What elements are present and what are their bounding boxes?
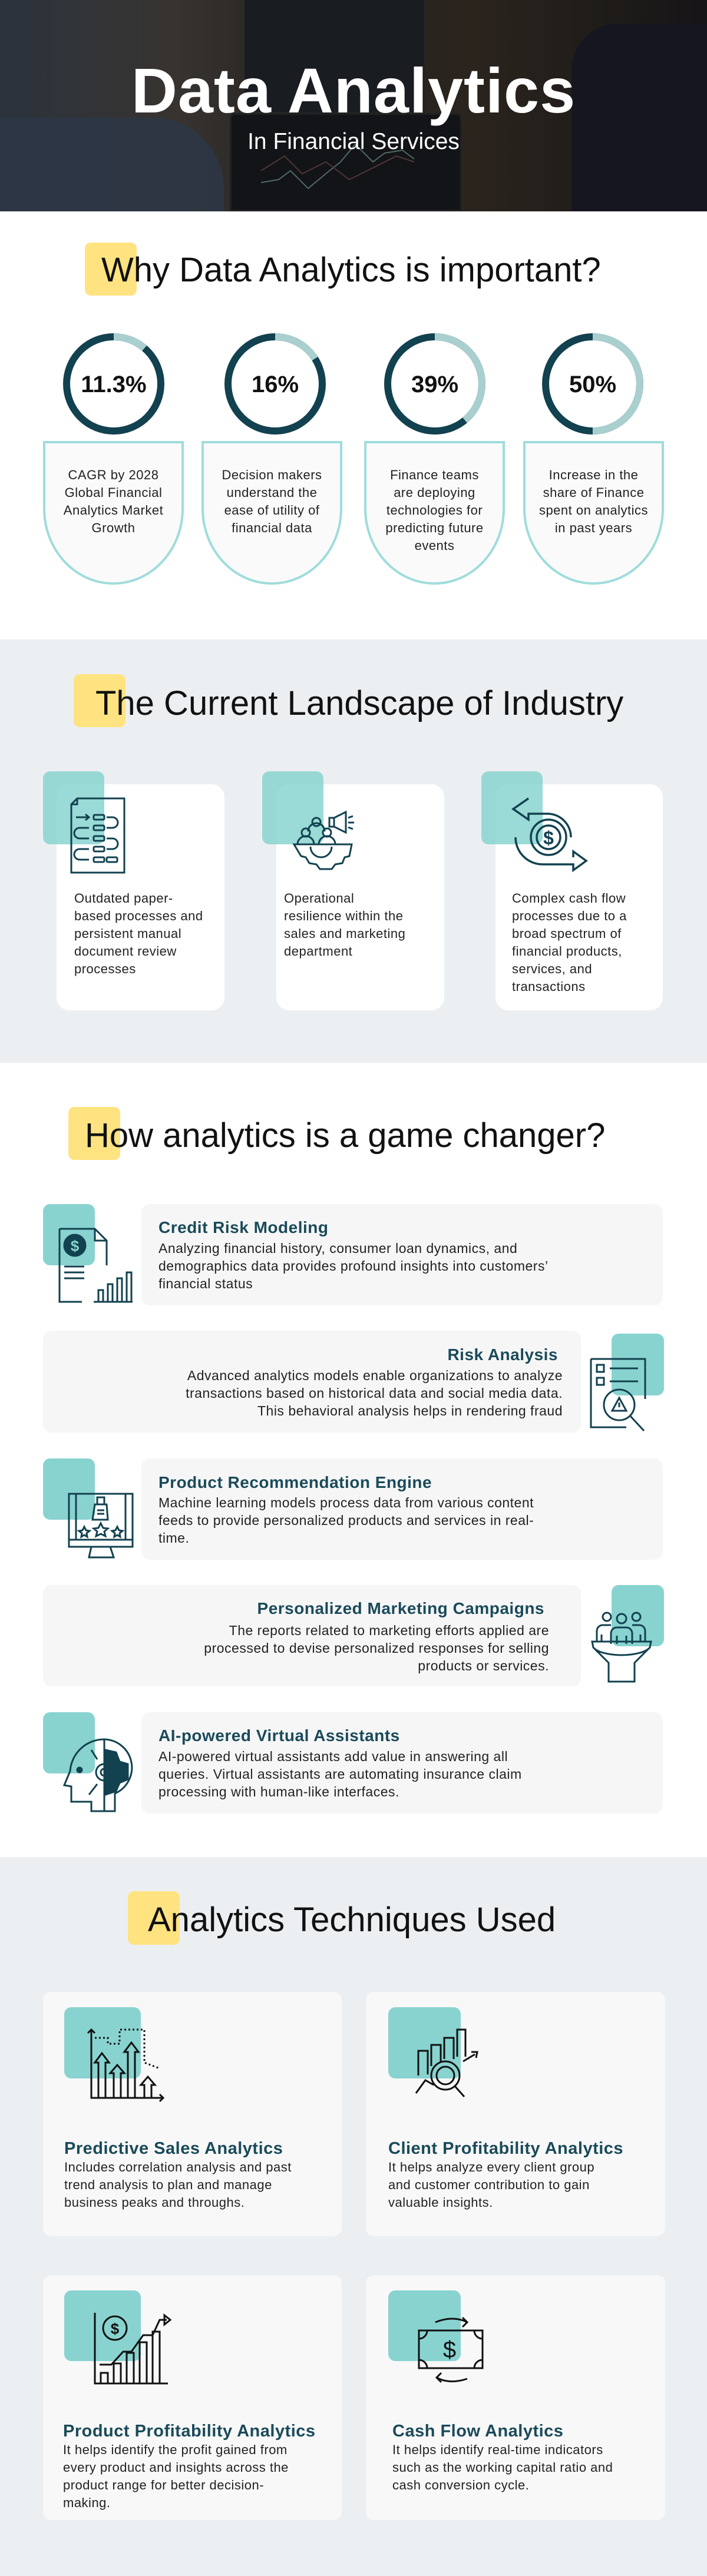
card: product profitability: product range for better decision- bbox=[63, 2478, 264, 2492]
row: product recommendation: time. bbox=[158, 1530, 189, 1546]
card: cash flow: cash conversion cycle. bbox=[392, 2478, 529, 2492]
icon: banknote with arrows: $ bbox=[443, 2337, 456, 2363]
row: AI virtual assistants: processing with human-like interfaces. bbox=[158, 1784, 399, 1799]
row: AI virtual assistants bbox=[43, 1712, 663, 1814]
ring 11.3%: 11.3% bbox=[81, 372, 147, 397]
card: product profitability: making. bbox=[63, 2495, 111, 2510]
stat 2: Decision makers bbox=[222, 468, 322, 482]
stat 2 bbox=[201, 333, 342, 585]
stat 4: share of Finance bbox=[543, 485, 644, 500]
row: personalized marketing bbox=[43, 1585, 664, 1686]
stat 4: in past years bbox=[555, 520, 632, 535]
card: operational resilience: resilience within the bbox=[284, 909, 403, 923]
stat 3: technologies for bbox=[386, 503, 483, 518]
row: credit risk bbox=[43, 1204, 663, 1305]
stat 4: 50% bbox=[569, 372, 616, 397]
heading: why important: Why Data Analytics is important? bbox=[101, 251, 601, 289]
card: predictive sales bbox=[43, 1992, 342, 2236]
stat 2: understand the bbox=[227, 485, 317, 500]
heading bbox=[74, 674, 623, 727]
stat 3: 39% bbox=[411, 372, 458, 397]
stat 3: Finance teams bbox=[390, 468, 479, 482]
row: risk analysis: transactions based on historical data and social media data. bbox=[186, 1385, 563, 1401]
row: risk analysis: This behavioral analysis helps in rendering fraud bbox=[257, 1403, 563, 1418]
card: complex cash flow bbox=[481, 771, 663, 1010]
stat 1: Global Financial bbox=[65, 485, 162, 500]
card: complex cash flow: processes due to a bbox=[512, 909, 627, 923]
card: paper processes bbox=[43, 771, 224, 1010]
icon: people funnel bbox=[591, 1612, 652, 1683]
card: complex cash flow: Complex cash flow bbox=[512, 891, 626, 906]
card: client profitability bbox=[366, 1992, 665, 2236]
card: product profitability: Product Profitability Analytics bbox=[63, 2422, 316, 2441]
icon: bars with magnifier bbox=[415, 2029, 478, 2097]
stat 4: spent on analytics bbox=[539, 503, 648, 518]
icon: rising arrows chart bbox=[87, 2028, 164, 2102]
card: operational resilience: department bbox=[284, 944, 352, 959]
card: client profitability: and customer contribution to gain bbox=[388, 2177, 590, 2192]
row: personalized marketing: products or services. bbox=[418, 1658, 549, 1673]
stat 1: Growth bbox=[92, 520, 135, 535]
stat 3: predicting future bbox=[385, 520, 484, 535]
card: paper processes: based processes and bbox=[74, 909, 203, 923]
card: complex cash flow: services, and bbox=[512, 962, 592, 976]
row: risk analysis: Risk Analysis bbox=[447, 1345, 558, 1364]
row: product recommendation: Product Recommendation Engine bbox=[158, 1473, 432, 1491]
card: product profitability: every product and insights across the bbox=[63, 2460, 289, 2475]
icon: document dollar chart: $ bbox=[71, 1237, 80, 1255]
card: paper processes: Outdated paper- bbox=[74, 891, 173, 906]
icon: cash cycle: $ bbox=[543, 827, 554, 848]
stat 3 bbox=[364, 333, 505, 585]
heading bbox=[128, 1891, 556, 1945]
icon: document dollar chart bbox=[59, 1228, 133, 1302]
card: predictive sales: business peaks and throughs. bbox=[64, 2195, 245, 2210]
card: product profitability: It helps identify the profit gained from bbox=[63, 2442, 288, 2457]
icon: monitor with product and stars bbox=[68, 1493, 133, 1558]
row: credit risk: financial status bbox=[158, 1276, 253, 1291]
stat 1 bbox=[43, 333, 184, 585]
row: personalized marketing: processed to devise personalized responses for selling bbox=[204, 1640, 549, 1656]
subtitle: In Financial Services bbox=[247, 129, 460, 154]
card: complex cash flow: broad spectrum of bbox=[512, 926, 622, 941]
card: cash flow bbox=[366, 2275, 665, 2520]
row: product recommendation: Machine learning models process data from various content bbox=[158, 1495, 534, 1510]
card: product profitability bbox=[43, 2275, 342, 2520]
row: personalized marketing: The reports related to marketing efforts applied are bbox=[229, 1623, 549, 1638]
heading: The Current Landscape of Industry bbox=[95, 684, 623, 722]
card: cash flow: such as the working capital ratio and bbox=[392, 2460, 613, 2475]
card: client profitability: It helps analyze every client group bbox=[388, 2160, 594, 2174]
stat 3: events bbox=[415, 538, 454, 553]
row: personalized marketing: Personalized Marketing Campaigns bbox=[257, 1599, 544, 1617]
card: complex cash flow: financial products, bbox=[512, 944, 622, 959]
card: cash flow: It helps identify real-time indicators bbox=[392, 2442, 603, 2457]
ring 11.3% bbox=[63, 333, 164, 435]
card: predictive sales: Predictive Sales Analytics bbox=[64, 2139, 283, 2158]
hero banner bbox=[0, 0, 707, 211]
icon: cash cycle bbox=[511, 797, 588, 873]
section: current landscape bbox=[0, 639, 707, 1063]
stat 1: Analytics Market bbox=[64, 503, 163, 518]
stat 2: financial data bbox=[232, 520, 312, 535]
icon: dollar growth chart: $ bbox=[111, 2320, 120, 2338]
card: operational resilience bbox=[262, 771, 444, 1010]
icon: AI head with gear bbox=[62, 1738, 133, 1812]
title: Data Analytics bbox=[131, 55, 576, 126]
row: credit risk: Credit Risk Modeling bbox=[158, 1218, 328, 1236]
heading: why important bbox=[85, 243, 601, 296]
heading: game changer: How analytics is a game changer? bbox=[85, 1116, 605, 1155]
row: product recommendation bbox=[43, 1458, 663, 1560]
row: AI virtual assistants: AI-powered virtual assistants add value in answering all bbox=[158, 1749, 508, 1764]
card: predictive sales: trend analysis to plan and manage bbox=[64, 2177, 272, 2192]
card: paper processes: persistent manual bbox=[74, 926, 181, 941]
row: risk analysis bbox=[43, 1331, 664, 1433]
row: product recommendation: feeds to provide personalized products and services in real- bbox=[158, 1513, 534, 1528]
icon: document warning magnifier bbox=[590, 1358, 646, 1431]
card: predictive sales: Includes correlation analysis and past bbox=[64, 2160, 292, 2174]
row: risk analysis: Advanced analytics models enable organizations to analyze bbox=[187, 1368, 563, 1383]
card: cash flow: Cash Flow Analytics bbox=[392, 2422, 563, 2441]
stat 3: are deploying bbox=[394, 485, 475, 500]
card: paper processes: document review bbox=[74, 944, 177, 959]
icon: banknote with arrows bbox=[418, 2317, 483, 2383]
card: client profitability: valuable insights. bbox=[388, 2195, 493, 2210]
card bbox=[43, 441, 184, 585]
icon: document flow bbox=[71, 797, 125, 874]
row: AI virtual assistants: AI-powered Virtual Assistants bbox=[158, 1726, 400, 1745]
row: credit risk: Analyzing financial history, consumer loan dynamics, and bbox=[158, 1241, 517, 1256]
stat 1: CAGR by 2028 bbox=[68, 468, 158, 482]
card: operational resilience: Operational bbox=[284, 891, 354, 906]
stat 2: ease of utility of bbox=[224, 503, 319, 518]
section: analytics techniques bbox=[0, 1857, 707, 2576]
card: client profitability: Client Profitability Analytics bbox=[388, 2139, 623, 2158]
row: credit risk: demographics data provides profound insights into customers’ bbox=[158, 1258, 549, 1274]
icon: dollar growth chart bbox=[94, 2313, 172, 2385]
stat 4: Increase in the bbox=[549, 468, 638, 482]
heading: Analytics Techniques Used bbox=[148, 1901, 556, 1939]
card: complex cash flow: transactions bbox=[512, 979, 586, 994]
stat 4 bbox=[523, 333, 664, 585]
row: AI virtual assistants: queries. Virtual assistants are automating insurance claim bbox=[158, 1766, 522, 1782]
card: operational resilience: sales and marketing bbox=[284, 926, 405, 941]
card: paper processes: processes bbox=[74, 962, 136, 976]
stat 2: 16% bbox=[252, 372, 299, 397]
icon: team gear megaphone bbox=[292, 810, 354, 870]
